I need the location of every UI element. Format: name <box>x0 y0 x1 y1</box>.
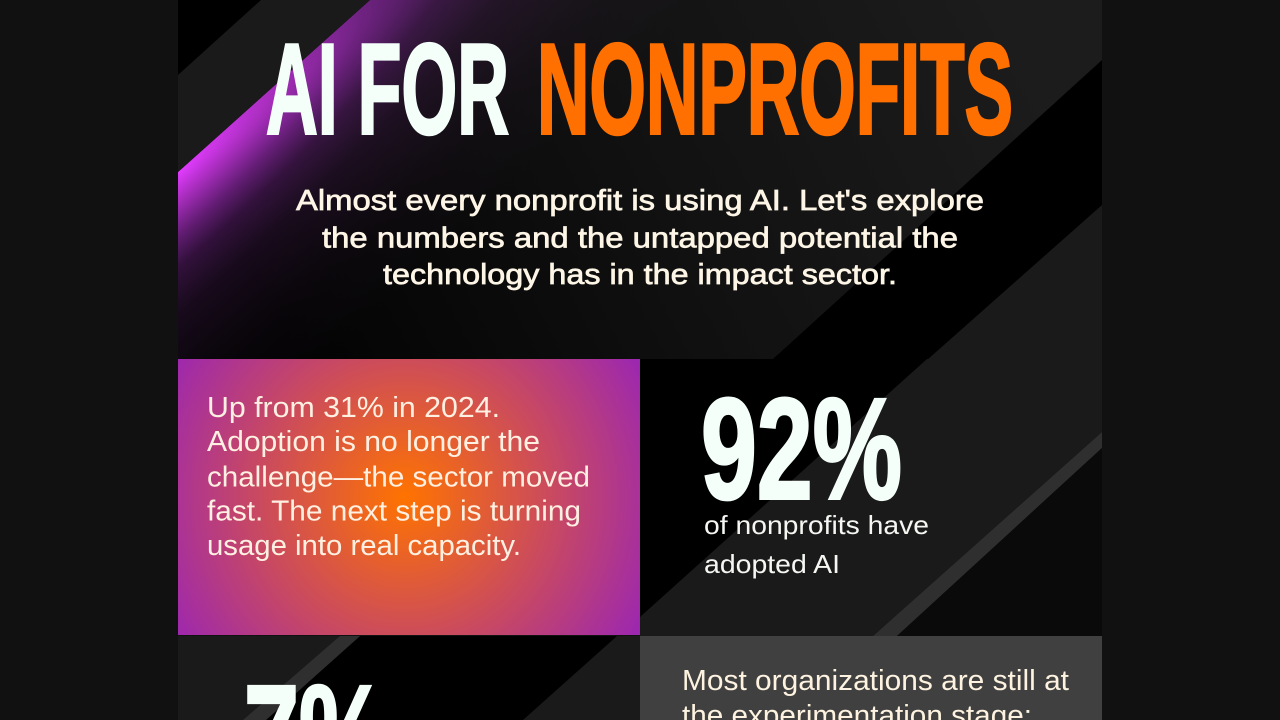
subtitle: the numbers and the untapped potential the <box>322 222 958 254</box>
note text <box>682 665 1069 720</box>
callout text: Up from 31% in 2024. <box>207 392 500 424</box>
stat number: 92% <box>701 368 902 530</box>
subtitle: Almost every nonprofit is using AI. Let's explore <box>296 185 984 217</box>
stat label <box>704 510 929 579</box>
title: AI FOR <box>266 18 509 162</box>
stat label: of nonprofits have <box>704 510 929 540</box>
panel: second stat background <box>178 636 640 720</box>
panel: adoption stat background <box>640 359 1102 636</box>
subtitle <box>296 185 984 291</box>
stat label: adopted AI <box>704 549 840 579</box>
panel: header section background <box>178 0 1102 360</box>
callout text: fast. The next step is turning <box>207 496 581 528</box>
panel: gradient callout <box>178 359 640 635</box>
callout text <box>207 392 590 562</box>
callout text: challenge—the sector moved <box>207 462 590 494</box>
title <box>266 18 1013 162</box>
stat: 92% adopted <box>701 368 929 579</box>
panel: experimentation note <box>640 636 1102 720</box>
note text: Most organizations are still at <box>682 665 1069 697</box>
callout text: usage into real capacity. <box>207 530 521 562</box>
subtitle: technology has in the impact sector. <box>383 259 897 291</box>
callout text: Adoption is no longer the <box>207 426 540 458</box>
